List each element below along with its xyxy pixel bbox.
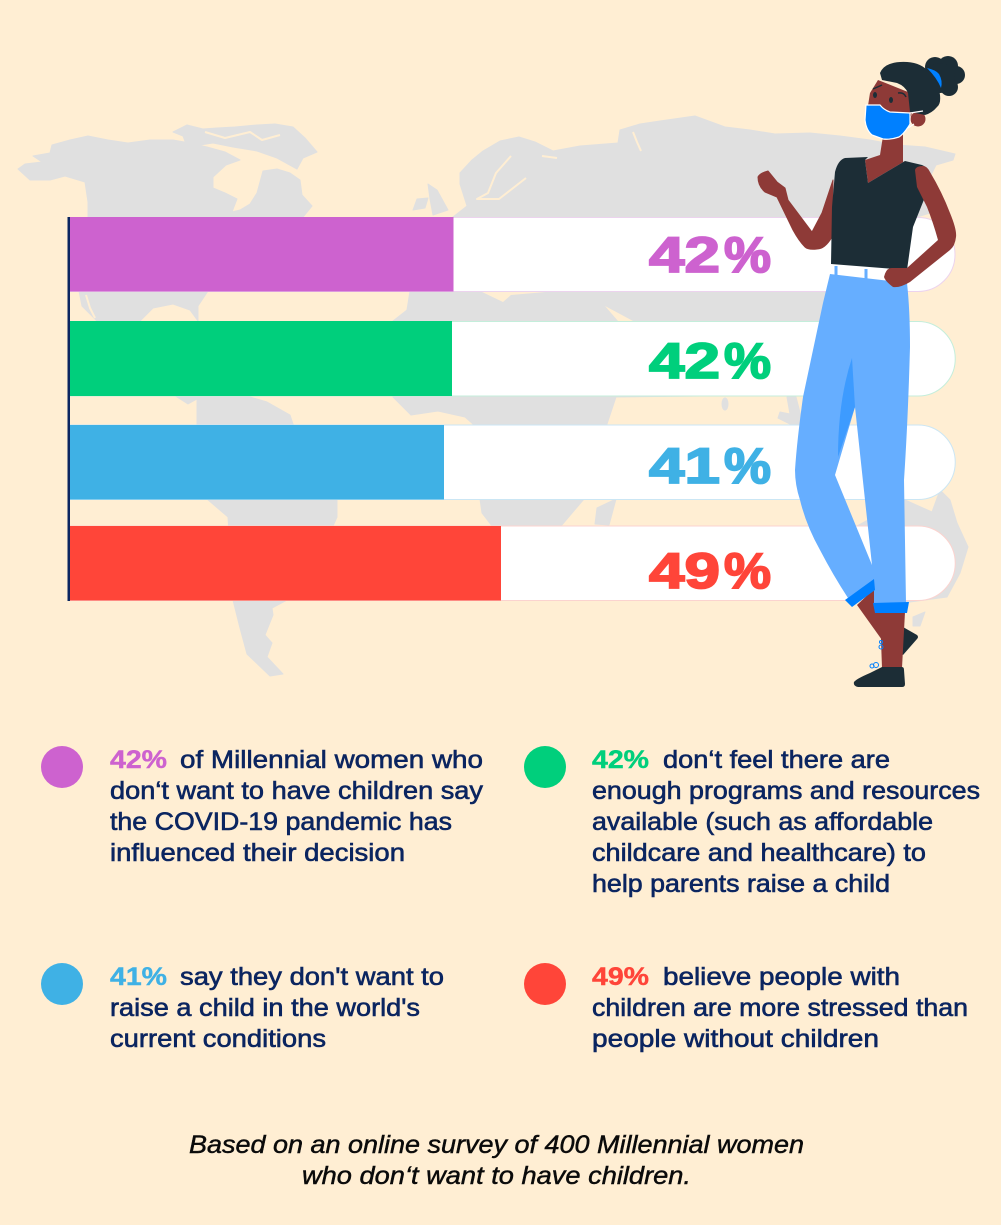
bar track: 49% stress (70, 526, 955, 600)
trouser inner shadow (838, 358, 855, 457)
bar fill: purple (70, 217, 454, 292)
eyes and brows (873, 85, 906, 103)
map: Sri Lanka (722, 398, 728, 410)
footnote: who don‘t want to have children. (302, 1162, 691, 1190)
shoe laces (870, 640, 883, 668)
trousers (795, 274, 910, 603)
legend text: don‘t want to have children say (110, 777, 484, 805)
legend text: of Millennial women who (180, 746, 483, 774)
legend text (592, 963, 968, 1053)
bar value: 41% blue: % (724, 438, 771, 494)
legend text: 49% (592, 963, 649, 991)
bar track: 42% covid (70, 218, 955, 292)
map: North America (18, 136, 312, 404)
footnote: Based on an online survey of 400 Millennial women (189, 1131, 804, 1159)
legend text: available (such as affordable (592, 808, 933, 836)
map: Mediterranean (480, 291, 557, 302)
map: inland seas (86, 132, 641, 321)
neck (865, 132, 905, 183)
back leg skin (857, 588, 885, 640)
belt (830, 267, 907, 281)
map: White Sea (542, 156, 557, 158)
legend text: 41% (110, 963, 167, 991)
legend text: don‘t feel there are (663, 746, 890, 774)
legend text: 42% (110, 746, 167, 774)
front leg skin (880, 612, 905, 668)
bar value: 41% blue (649, 438, 771, 494)
axis line (68, 217, 70, 601)
map: South America (197, 397, 337, 676)
legend text: childcare and healthcare) to (592, 839, 926, 867)
hair bun (925, 56, 965, 96)
legend text: 42% (592, 746, 649, 774)
bar value: 42% purple: % (724, 227, 771, 283)
bar value: 42% green: 42 (649, 333, 720, 389)
bar value: 42% purple: 42 (649, 227, 720, 283)
legend dot: blue (41, 963, 83, 1005)
legend text (110, 746, 484, 867)
legend text: current conditions (110, 1025, 326, 1053)
bar value: 49% red: % (724, 543, 771, 599)
front shoe (854, 667, 905, 687)
headband (927, 68, 942, 88)
map: Ob gulf (633, 132, 641, 151)
bar value: 42% purple (649, 227, 771, 283)
world map background (18, 116, 968, 676)
legend text: people without children (592, 1025, 879, 1053)
belt loops (836, 266, 866, 279)
legend text: the COVID-19 pandemic has (110, 808, 452, 836)
map: Gulf of California (86, 295, 95, 318)
map: Baltic Sea (477, 156, 526, 199)
legend text (110, 963, 444, 1053)
illustration: woman wearing a face mask (758, 56, 965, 687)
bar value: 49% red: 49 (649, 543, 720, 599)
map: Ireland (413, 198, 428, 210)
legend text (592, 746, 980, 898)
ear (910, 112, 926, 126)
top (831, 157, 927, 270)
map: Eurasia and Africa (393, 116, 955, 526)
bar value: 42% green (649, 333, 771, 389)
raised arm (758, 171, 833, 249)
face (867, 80, 912, 140)
legend: 42% resources (524, 746, 980, 898)
legend text: say they don't want to (180, 963, 444, 991)
legend text: influenced their decision (110, 839, 405, 867)
bar chart (68, 217, 955, 601)
legend: 42% covid (41, 746, 484, 867)
map: Southeast Asia (778, 397, 803, 424)
back shoe (897, 627, 918, 655)
back cuff (845, 579, 875, 607)
legend text: help parents raise a child (592, 870, 890, 898)
footnote (189, 1131, 804, 1190)
bar value: 42% green: % (724, 333, 771, 389)
map: Red Sea (605, 306, 633, 321)
legend text: believe people with (663, 963, 900, 991)
map: Arctic islands (173, 124, 317, 169)
legend dot: purple (41, 746, 83, 788)
map: Tasmania (913, 612, 925, 626)
legend text: children are more stressed than (592, 994, 968, 1022)
hip arm (884, 166, 956, 287)
map: Great Britain (428, 184, 448, 215)
bar track: 41% conditions (70, 425, 955, 500)
bar value: 41% blue: 41 (649, 438, 720, 494)
bar fill: green (70, 321, 452, 396)
mask straps (908, 111, 923, 128)
front cuff (873, 602, 909, 613)
legend: 41% conditions (41, 963, 444, 1053)
legend dot: green (524, 746, 566, 788)
map: Australia (857, 490, 968, 602)
face mask (865, 105, 910, 139)
bar fill: blue (70, 425, 444, 500)
bar fill: red (70, 526, 501, 600)
bar value: 49% red (649, 543, 771, 599)
bar track: 42% resources (70, 322, 955, 396)
map: Arctic channels (205, 132, 280, 140)
legend: 49% stress (524, 963, 968, 1053)
legend text: raise a child in the world's (110, 994, 420, 1022)
hair (880, 62, 940, 115)
legend dot: red (524, 963, 566, 1005)
legend text: enough programs and resources (592, 777, 980, 805)
map: Madagascar (595, 499, 616, 525)
